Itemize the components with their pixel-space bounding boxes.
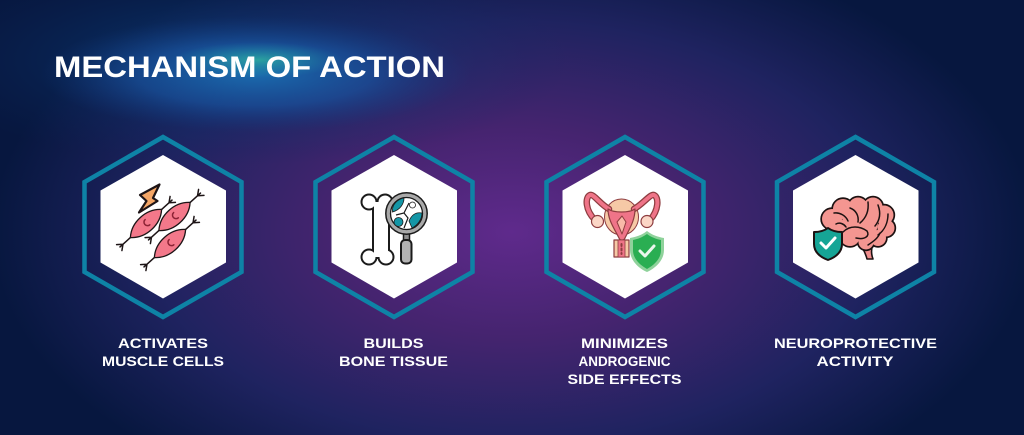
panel: activates muscle cells: [84, 137, 242, 369]
label 4: NEUROPROTECTIVE: [774, 335, 937, 351]
label 2: BUILDS: [364, 335, 424, 351]
label 4: ACTIVITY: [816, 353, 894, 369]
label 3: MINIMIZES: [581, 335, 668, 351]
icon: muscle cells with lightning bolt: [114, 184, 207, 274]
panel: builds bone tissue: [316, 137, 472, 369]
white hexagon 4: [793, 155, 918, 298]
label 3: SIDE EFFECTS: [568, 371, 682, 387]
outer hexagon 2: [316, 137, 472, 317]
outer hexagon 4: [777, 137, 934, 317]
icon: bone under magnifying glass: [362, 193, 427, 264]
white hexagon 1: [100, 155, 226, 298]
white hexagon 3: [562, 155, 688, 298]
panel: minimizes androgenic side effects: [546, 137, 704, 387]
label 1: ACTIVATES: [118, 335, 208, 351]
label 1: MUSCLE CELLS: [102, 353, 224, 369]
icon: uterus with green shield: [587, 195, 657, 257]
label 3: ANDROGENIC: [578, 353, 670, 369]
outer hexagon 1: [84, 137, 242, 317]
icon: brain with teal shield: [814, 198, 894, 260]
label 2: BONE TISSUE: [339, 353, 448, 369]
white hexagon 2: [332, 155, 457, 298]
panel: neuroprotective activity: [774, 137, 937, 369]
title: MECHANISM OF ACTION: [54, 51, 445, 84]
outer hexagon 3: [546, 137, 704, 317]
